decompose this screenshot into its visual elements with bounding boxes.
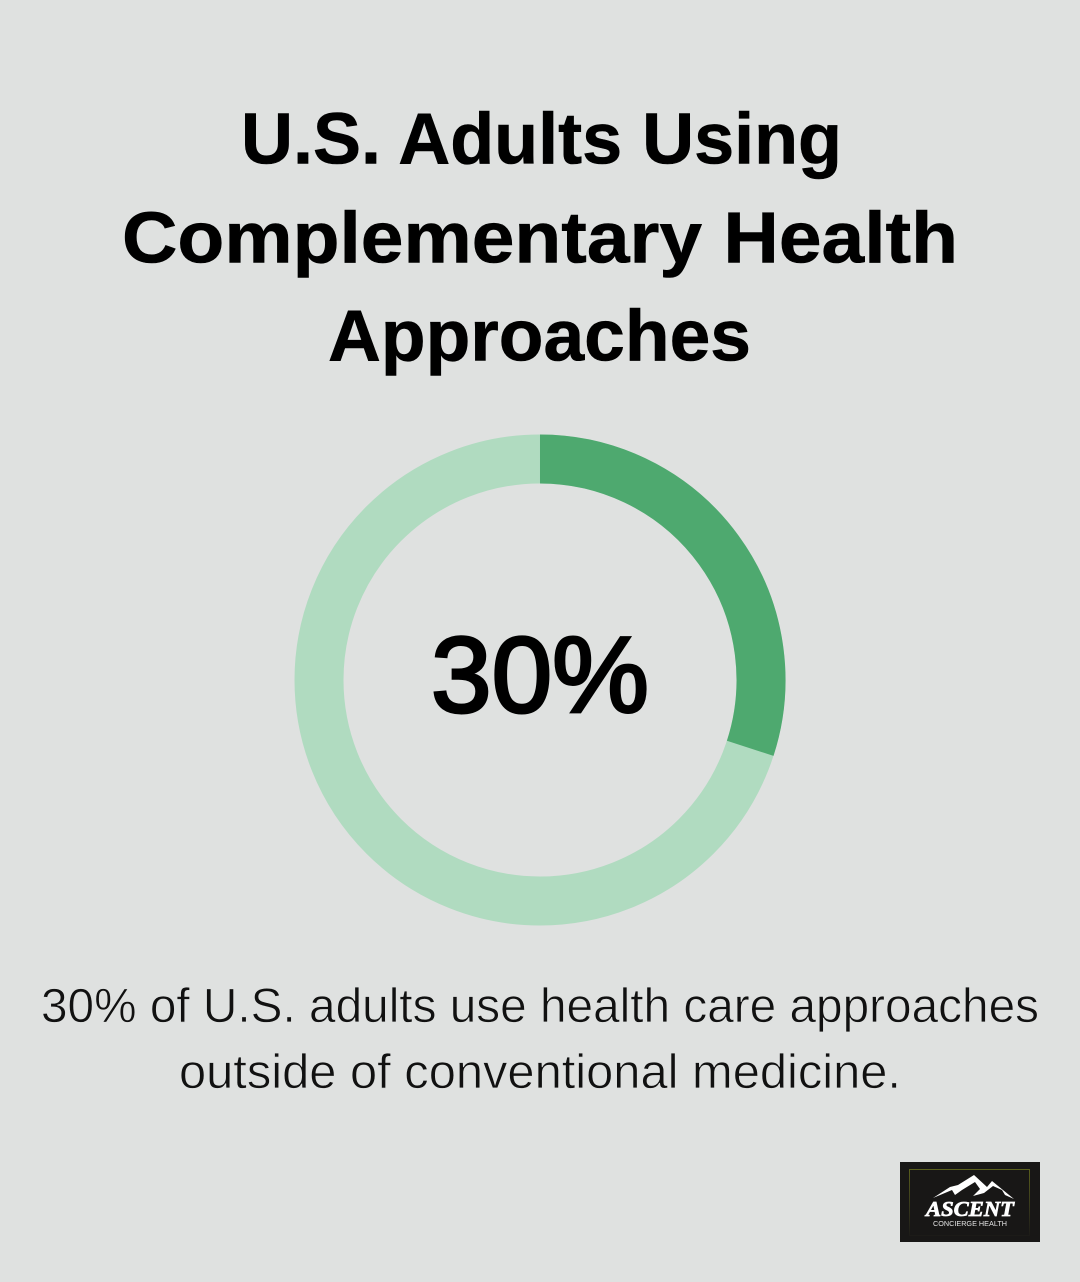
title: U.S. Adults Using — [241, 100, 842, 180]
description text — [41, 980, 1039, 1099]
icon: mountains — [933, 1175, 1014, 1199]
title — [122, 100, 958, 376]
logo wordmark: ASCENT — [924, 1197, 1015, 1221]
logo tagline: CONCIERGE HEALTH — [933, 1219, 1007, 1228]
description text: outside of conventional medicine. — [179, 1046, 901, 1099]
description text: 30% of U.S. adults use health care approaches — [41, 980, 1039, 1033]
title: Complementary Health — [122, 198, 958, 278]
donut center value: 30% — [431, 614, 649, 735]
logo: Ascent Concierge Health — [900, 1162, 1040, 1242]
donut chart: 30% — [319, 459, 761, 901]
title: Approaches — [328, 296, 751, 376]
